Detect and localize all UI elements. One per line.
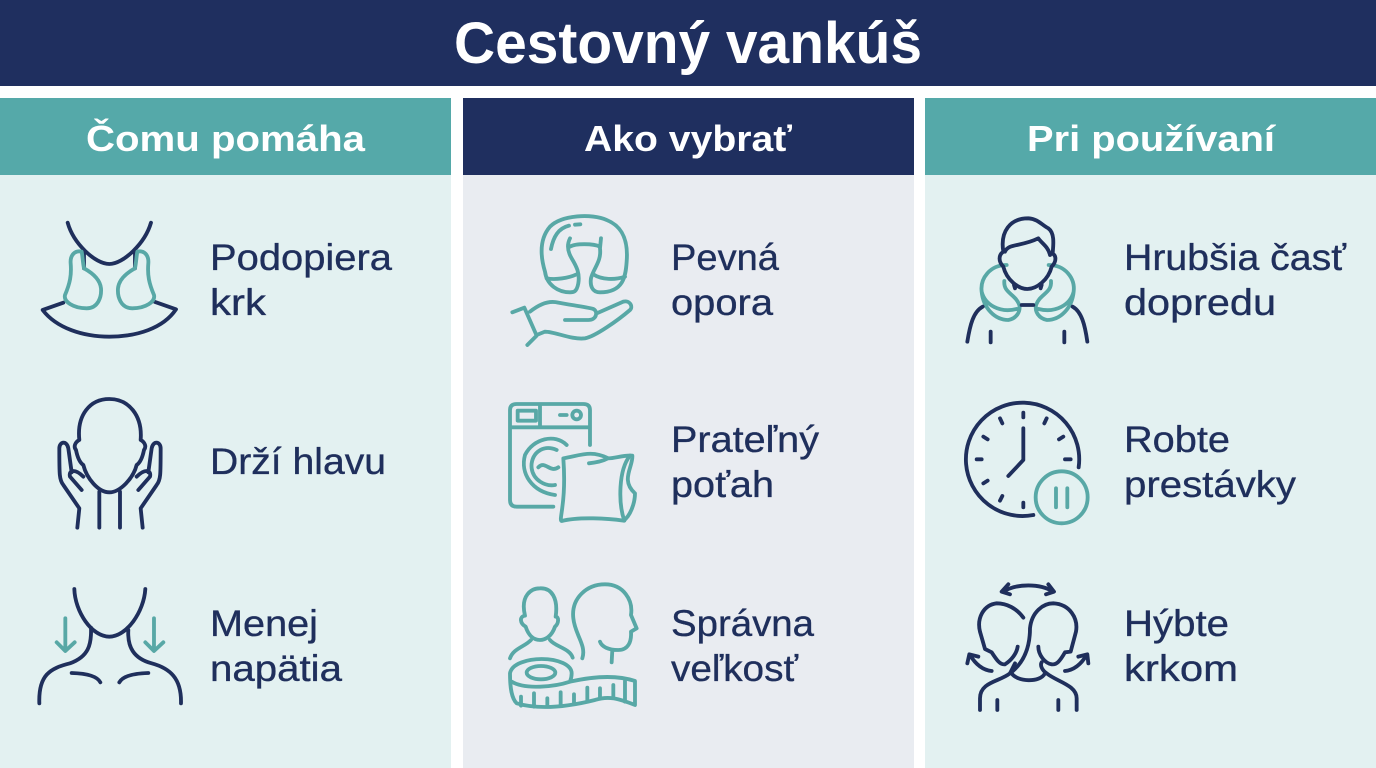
text: Menej napätia: Menej: [210, 603, 318, 644]
text: Hýbte krkom: [1124, 603, 1238, 689]
text: Robte prestávky: Robte: [1124, 419, 1230, 460]
text: Hrubšia časť dopredu: dopredu: [1124, 282, 1276, 323]
text: Správna veľkosť: veľkosť: [671, 648, 799, 689]
text: Robte prestávky: [1124, 419, 1297, 505]
icon: neck rotation: [967, 584, 1088, 710]
heading: Ako vybrať: [463, 98, 914, 175]
heading: Čomu pomáha: Čomu pomáha: [86, 117, 366, 159]
icon: washing machine and pillow: [510, 404, 635, 521]
text: Podopiera krk: Podopiera: [210, 237, 392, 278]
text: Pevná opora: [671, 237, 779, 323]
heading: Pri používaní: [925, 98, 1376, 175]
text: Prateľný poťah: [671, 419, 820, 505]
text: Hrubšia časť dopredu: Hrubšia časť: [1124, 237, 1347, 278]
text: Robte prestávky: prestávky: [1124, 464, 1297, 505]
title banner: [0, 0, 1376, 86]
text: Hýbte krkom: Hýbte: [1124, 603, 1229, 644]
text: Hýbte krkom: krkom: [1124, 648, 1238, 689]
text: Drží hlavu: Drží hlavu: [210, 441, 386, 482]
heading: Pri používaní: Pri používaní: [1027, 118, 1276, 159]
icon: neck and shoulders with down arrows: [39, 589, 181, 703]
text: Pevná opora: Pevná: [671, 237, 779, 278]
icon: pillow over hand: [512, 216, 631, 345]
icon: heads and measuring tape: [510, 584, 637, 707]
panel: Ako vybrať: [463, 98, 914, 768]
text: Hrubšia časť dopredu: [1124, 237, 1347, 323]
icon: head held by hands: [59, 399, 161, 528]
text: Správna veľkosť: [671, 603, 814, 689]
text: Menej napätia: [210, 603, 342, 689]
text: Prateľný poťah: Prateľný: [671, 419, 820, 460]
text: Podopiera krk: [210, 237, 392, 323]
text: Pevná opora: opora: [671, 282, 773, 323]
panel: Pri používaní: [925, 98, 1376, 768]
heading: Čomu pomáha: [0, 98, 451, 175]
icon: person wearing pillow: [967, 218, 1087, 342]
heading: Ako vybrať: Ako vybrať: [584, 118, 793, 159]
icon: clock with pause: [966, 403, 1088, 523]
text: Prateľný poťah: poťah: [671, 464, 774, 505]
text: Menej napätia: napätia: [210, 648, 342, 689]
text: Podopiera krk: krk: [210, 282, 267, 323]
text: Správna veľkosť: Správna: [671, 603, 814, 644]
icon: neck pillow on neck: [43, 223, 176, 337]
panel: Čomu pomáha: [0, 98, 451, 768]
title banner: Cestovný vankúš: [454, 11, 922, 76]
